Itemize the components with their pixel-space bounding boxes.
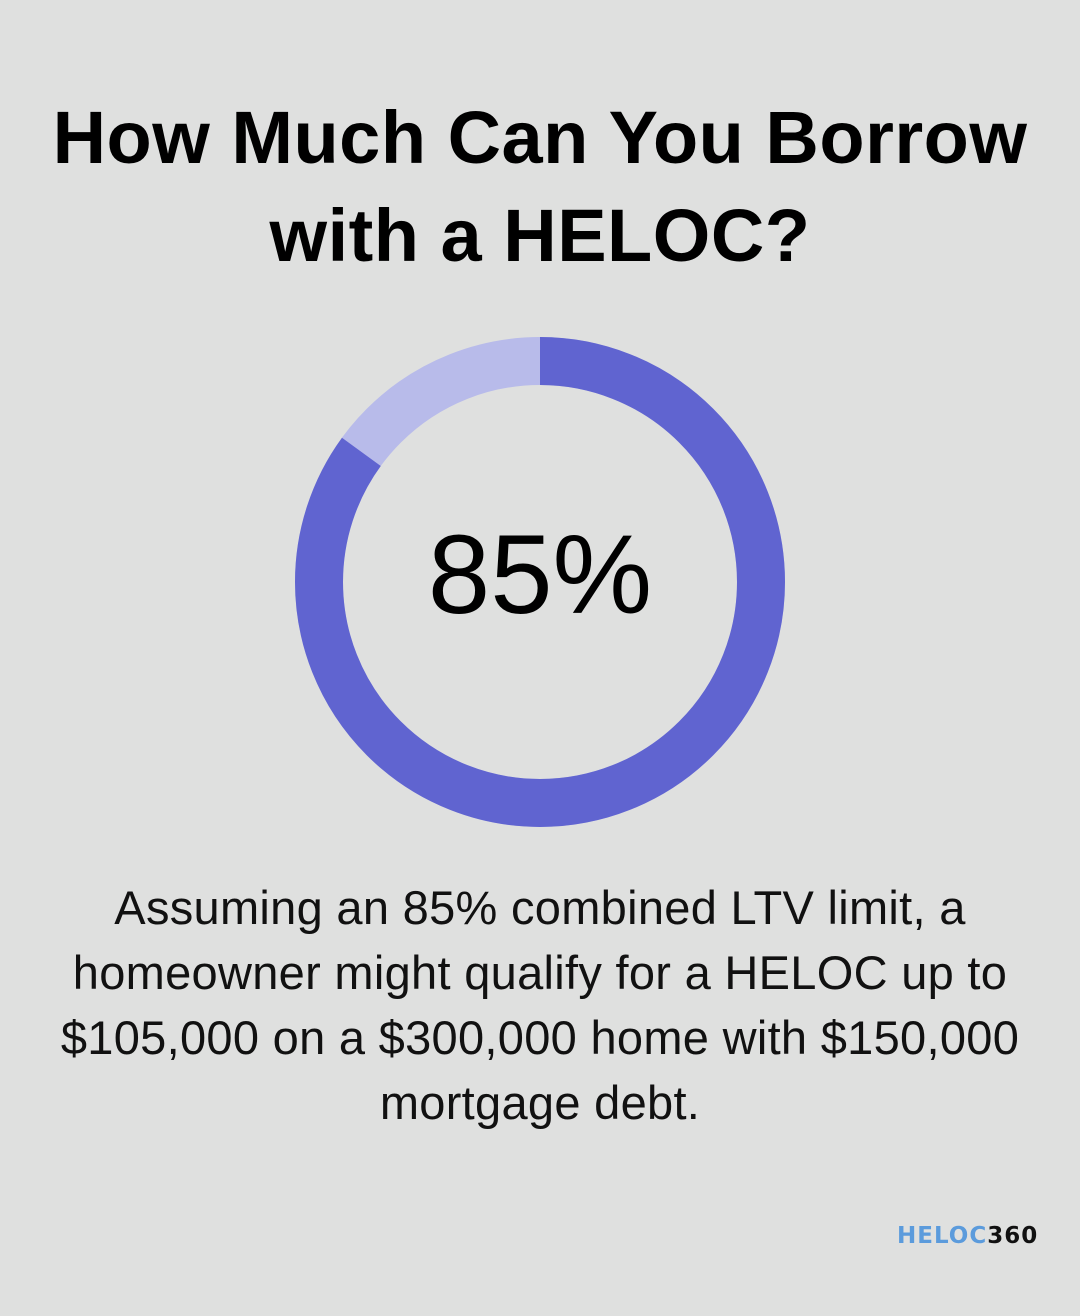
body text: $105,000 on a $300,000 home with $150,000 [61, 1011, 1019, 1064]
title: How Much Can You Borrow [53, 96, 1027, 179]
donut chart: 85% [428, 512, 652, 637]
title [53, 96, 1028, 277]
body text: mortgage debt. [380, 1076, 700, 1129]
title: with a HELOC? [270, 194, 810, 277]
body text: Assuming an 85% combined LTV limit, a [114, 881, 966, 934]
logo: HELOC360 [897, 1223, 1038, 1249]
body text [61, 881, 1019, 1129]
body text: homeowner might qualify for a HELOC up to [73, 946, 1007, 999]
